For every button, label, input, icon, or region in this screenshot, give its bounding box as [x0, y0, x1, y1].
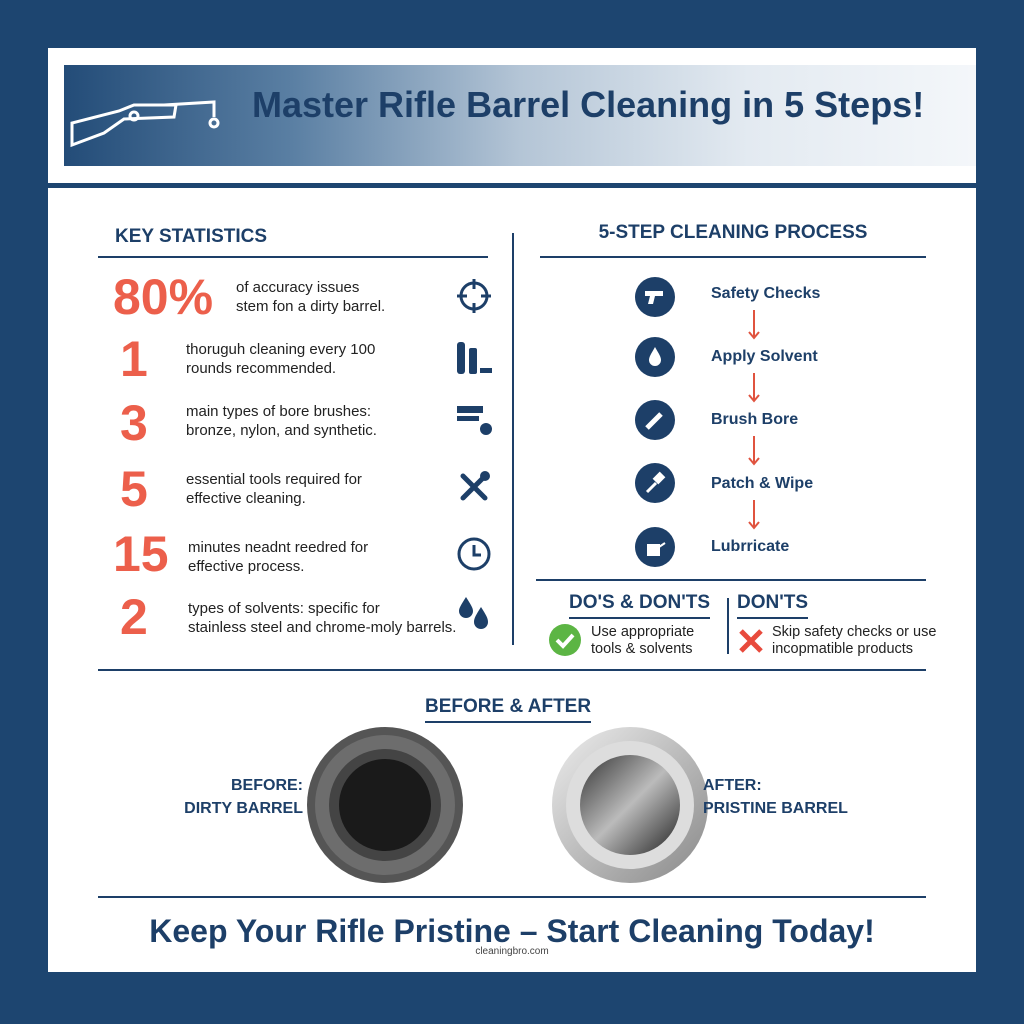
icon: dirty barrel [307, 727, 463, 883]
panel: before & after: BEFORE & AFTER [425, 696, 591, 717]
panel: dos and donts: Skip safety checks or use [772, 624, 936, 640]
text: minutes neadnt reedred for [188, 539, 368, 556]
text: essential tools required for [186, 471, 362, 488]
step 2 [635, 337, 675, 377]
stat 15: 15 [113, 526, 169, 582]
icon: check [549, 624, 581, 656]
text: of accuracy issues [236, 279, 359, 296]
text: types of solvents: specific for [188, 600, 380, 617]
text: Safety Checks [711, 285, 820, 302]
panel: dos and donts: incopmatible products [772, 641, 913, 657]
title: Master Rifle Barrel Cleaning in 5 Steps! [252, 84, 924, 125]
text: Lubrricate [711, 538, 789, 555]
panel: dos and donts: Use appropriate [591, 624, 694, 640]
text: effective process. [188, 558, 304, 575]
heading: 5-STEP CLEANING PROCESS [599, 222, 867, 243]
text: effective cleaning. [186, 490, 306, 507]
text: Apply Solvent [711, 348, 818, 365]
stat 3: 3 [120, 395, 148, 451]
stat 2: 2 [120, 589, 148, 645]
panel: dos and donts: DON'TS [737, 592, 808, 613]
icon: clean barrel [552, 727, 708, 883]
icon: cross [739, 629, 763, 653]
stat 80%: 80% [113, 269, 213, 325]
panel: before & after: DIRTY BARREL [184, 800, 303, 817]
icon: brush [457, 406, 492, 435]
icon: crosshair [457, 279, 491, 313]
arrows [748, 310, 760, 530]
step 4 [635, 463, 675, 503]
panel: dos and donts: DO'S & DON'TS [569, 592, 710, 613]
heading: KEY STATISTICS [115, 226, 267, 247]
icon: rifle [70, 100, 220, 148]
text: Patch & Wipe [711, 475, 813, 492]
icon: cartridges [457, 342, 492, 374]
panel: dos and donts [549, 592, 936, 657]
panel: before & after: PRISTINE BARREL [703, 800, 848, 817]
footer call to action: Keep Your Rifle Pristine – Start Cleaning Today! [149, 913, 875, 949]
text: Brush Bore [711, 411, 798, 428]
panel: dos and donts: tools & solvents [591, 641, 693, 657]
header banner [64, 65, 976, 166]
stat 5: 5 [120, 461, 148, 517]
step 1 [635, 277, 675, 317]
text: main types of bore brushes: [186, 403, 371, 420]
panel: before & after: BEFORE: [231, 777, 303, 794]
credit: cleaningbro.com [475, 946, 549, 957]
text: stem fon a dirty barrel. [236, 298, 385, 315]
text: bronze, nylon, and synthetic. [186, 422, 377, 439]
panel: before & after: AFTER: [703, 777, 762, 794]
step 3 [635, 400, 675, 440]
icon: tools [460, 471, 490, 500]
text: thoruguh cleaning every 100 [186, 341, 375, 358]
step 5 [635, 527, 675, 567]
icon: drops [459, 597, 488, 629]
icon: clock [458, 538, 490, 570]
text: rounds recommended. [186, 360, 336, 377]
panel: before & after [184, 696, 848, 883]
stat 1: 1 [120, 331, 148, 387]
text: stainless steel and chrome-moly barrels. [188, 619, 456, 636]
